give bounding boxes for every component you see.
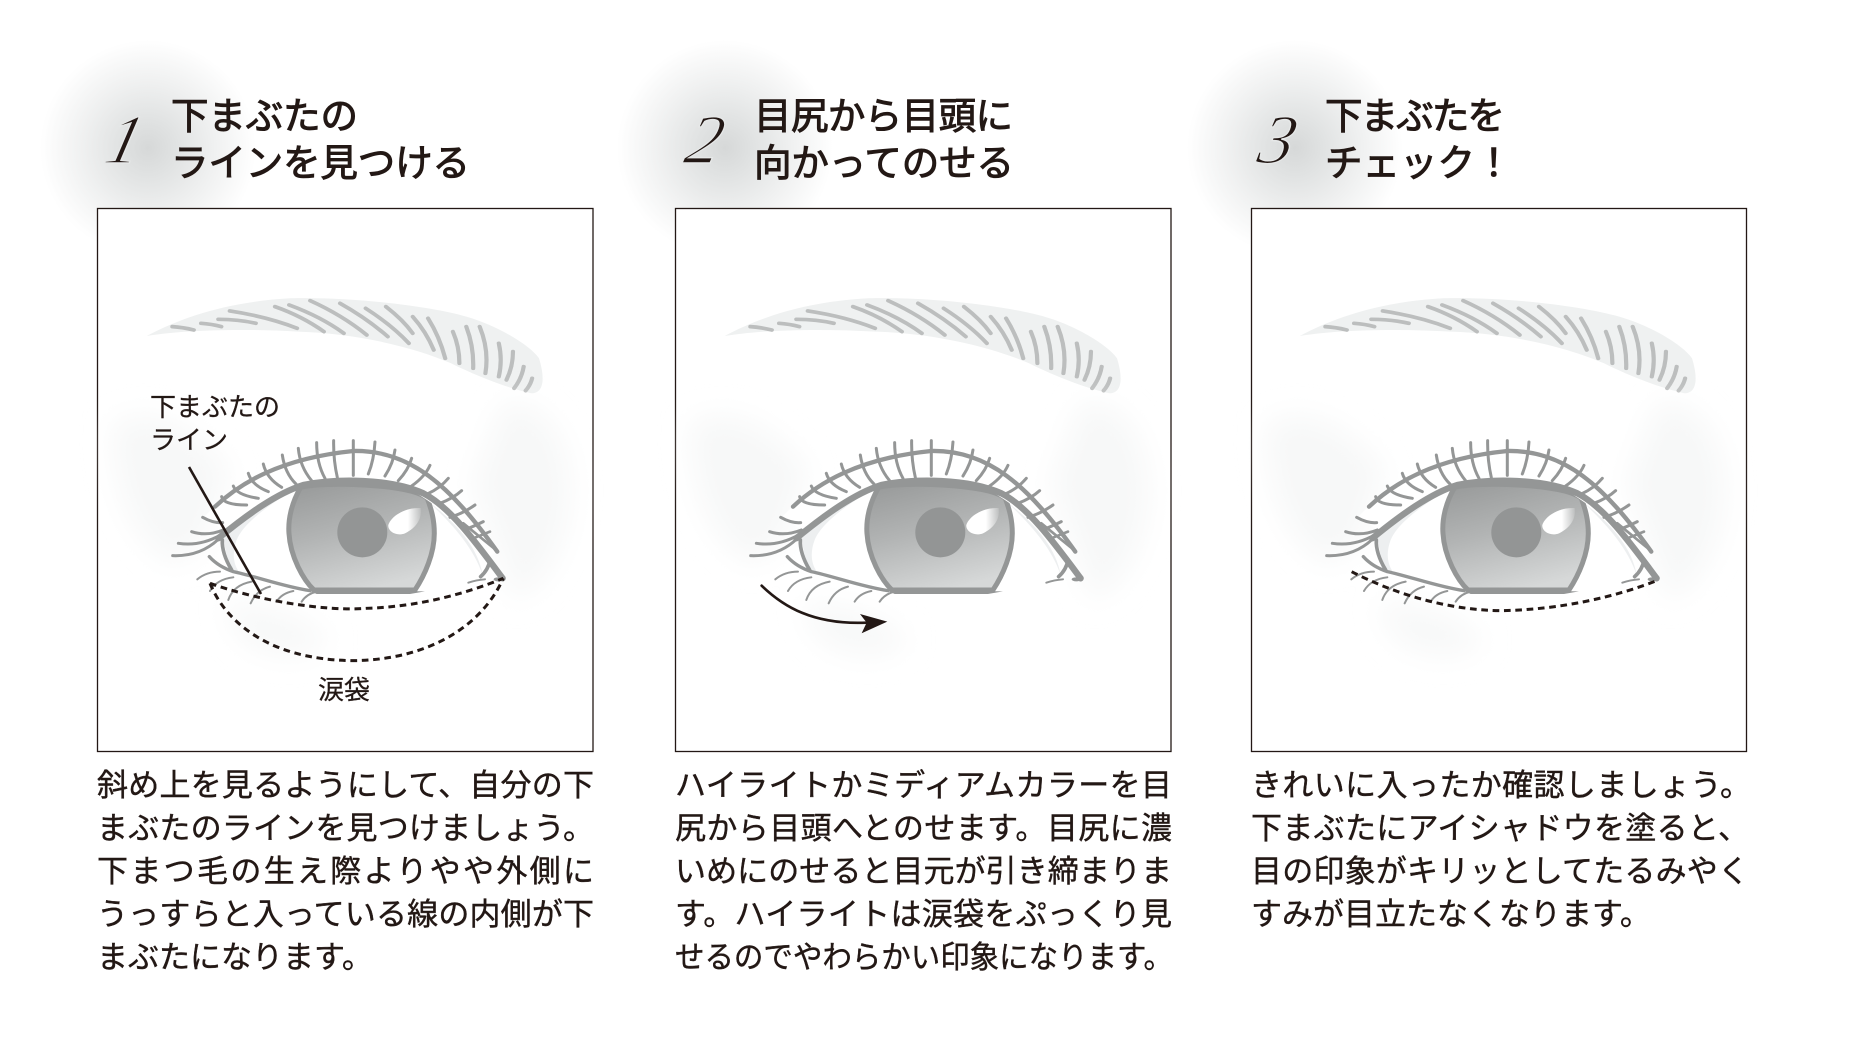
step 2 body text: 尻から目頭へとのせます。目尻に濃 [675,811,1172,846]
step 3 illustration frame [1252,208,1746,752]
step 1 body text: 下まつ毛の生え際よりやや外側に [97,854,594,889]
step 2 body text: せるのでやわらかい印象になります。 [675,940,1173,975]
step 2 heading: 向かってのせる [754,142,1014,184]
step 2 heading [754,95,1014,184]
panel: step 3 [1250,95,1751,932]
step 2 body text [675,768,1173,975]
eyebrow illustration 2 [725,298,1121,393]
step 3 heading: チェック！ [1325,142,1512,184]
step 2 body text: す。ハイライトは涙袋をぷっくり見 [675,897,1172,932]
number badge glow: step 1 [40,40,256,256]
step 3 body text [1251,768,1751,932]
label: lower eyelid line [150,392,280,455]
step 1 illustration frame [98,208,593,752]
eye illustration 2 [691,403,1148,655]
step 2 body text: ハイライトかミディアムカラーを目 [675,768,1172,803]
panel: step 1 [97,95,594,975]
dashed lower lid line [1352,572,1658,611]
eyebrow illustration 1 [147,298,543,393]
step 1 body text [97,768,594,975]
step 2 number: 2 [678,102,732,179]
step 1 body text: まぶたになります。 [97,940,373,975]
step 3 body text: 目の印象がキリッとしてたるみやく [1251,854,1749,889]
step 3 body text: きれいに入ったか確認しましょう。 [1251,768,1751,803]
step 2 illustration frame [676,208,1171,752]
number badge glow: step 3 [1187,40,1403,256]
step 2 heading: 目尻から目頭に [754,95,1013,137]
number badge glow: step 2 [617,40,833,256]
step 1 heading: ラインを見つける [171,142,470,184]
step 2 body text: いめにのせると目元が引き締まりま [675,854,1172,889]
label: tear bag: 涙袋 [318,675,370,705]
step 1 number: 1 [98,102,152,179]
step 3 body text: すみが目立たなくなります。 [1251,897,1651,932]
eye illustration 3 [1267,403,1724,655]
step 3 heading [1325,95,1512,184]
arrow: outer to inner corner [762,586,887,633]
step 3 heading: 下まぶたを [1325,95,1505,137]
step 1 body text: 斜め上を見るようにして、自分の下 [97,768,594,803]
step 1 heading: 下まぶたの [171,95,358,137]
eyebrow illustration 3 [1300,298,1696,393]
dashed lower lid and tear bag outline [210,578,503,661]
step 3 number: 3 [1250,102,1305,179]
label: lower eyelid line: 下まぶたの [150,392,280,422]
leader line [189,467,261,594]
eye illustration 1 [113,403,570,655]
step 1 body text: うっすらと入っている線の内側が下 [97,897,594,932]
panel: step 2 [675,95,1173,975]
step 1 heading [171,95,470,184]
label: lower eyelid line: ライン [150,425,228,455]
step 1 body text: まぶたのラインを見つけましょう。 [97,811,594,846]
step 3 body text: 下まぶたにアイシャドウを塗ると、 [1251,811,1749,846]
